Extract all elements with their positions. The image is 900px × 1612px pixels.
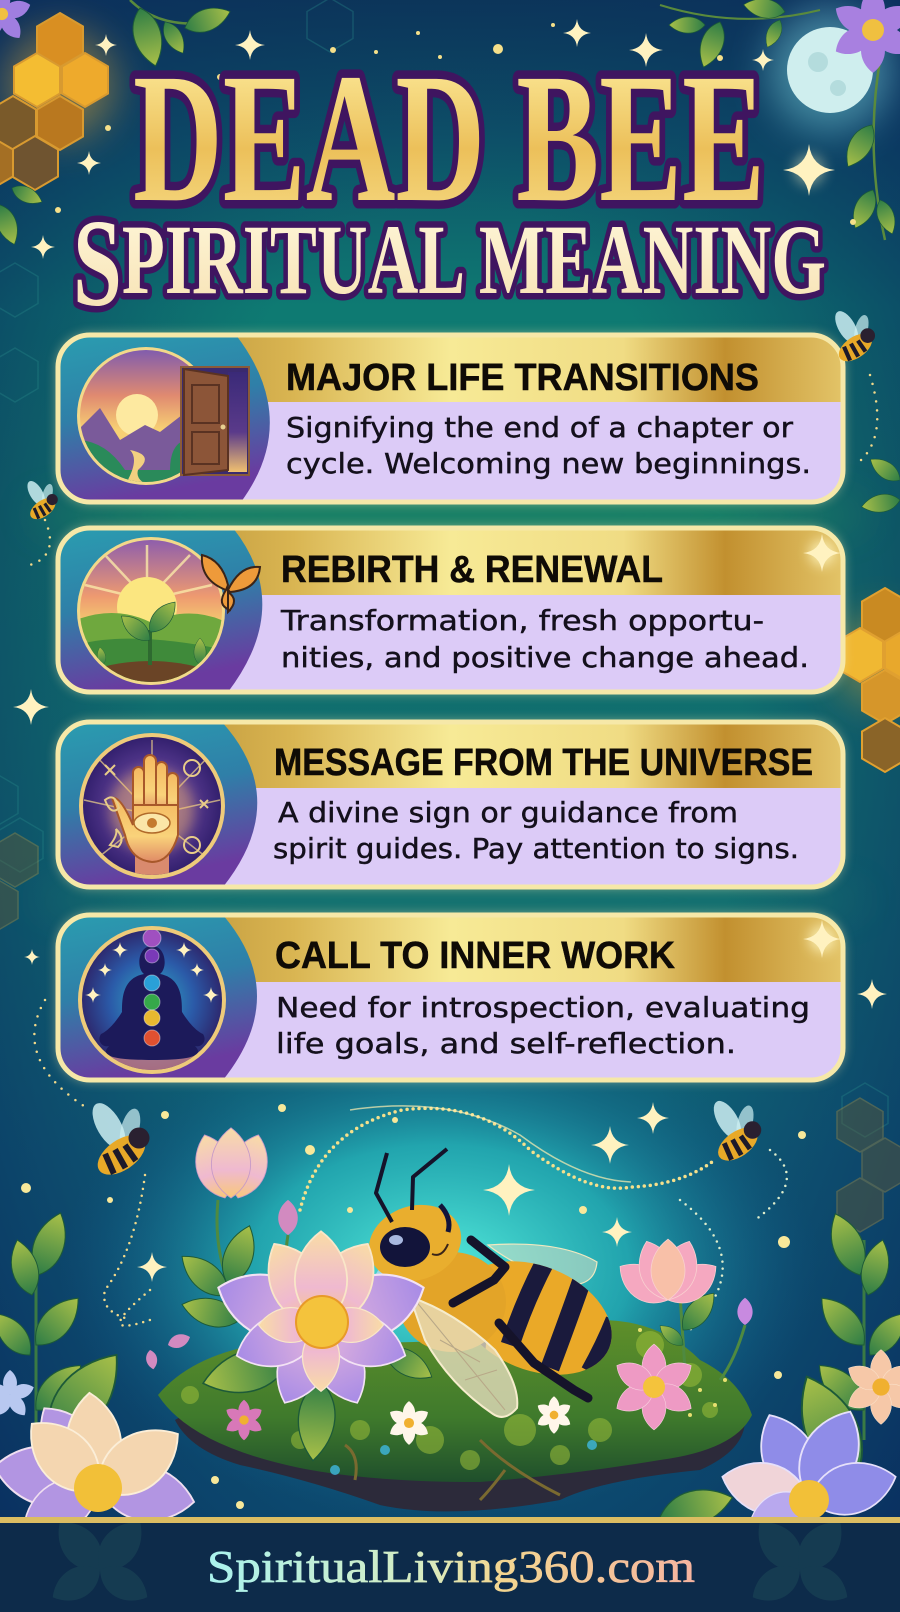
icon: glowing hand with eye xyxy=(79,733,225,886)
sparkle stars and lights top xyxy=(31,19,856,259)
card 3: message from the universe xyxy=(58,722,843,887)
mossy island xyxy=(158,1320,752,1511)
bee xyxy=(359,1149,629,1417)
pink flower upper right xyxy=(611,1235,753,1380)
description xyxy=(273,797,799,865)
thorax xyxy=(398,1252,506,1352)
legs xyxy=(453,1240,588,1398)
description: spirit guides. Pay attention to signs. xyxy=(273,833,799,865)
heading: MESSAGE FROM THE UNIVERSE xyxy=(274,742,813,784)
flower and vine top right xyxy=(660,0,900,240)
butterfly xyxy=(202,555,260,612)
back wing xyxy=(488,1244,597,1285)
right honeycomb xyxy=(835,588,900,772)
description: life goals, and self-reflection. xyxy=(276,1028,736,1060)
description: cycle. Welcoming new beginnings. xyxy=(286,448,811,480)
flower top left xyxy=(0,0,33,43)
small bee lower right xyxy=(708,1097,763,1167)
small bee lower left xyxy=(86,1098,152,1183)
moon xyxy=(768,8,892,132)
blue flower far left xyxy=(0,1370,36,1419)
abdomen with stripes xyxy=(481,1261,612,1375)
title line: Spiritual Meaning: S xyxy=(73,195,122,333)
heading: CALL TO INNER WORK xyxy=(275,935,676,977)
icon: meditating figure with chakras xyxy=(78,926,226,1080)
large flower bottom left xyxy=(0,1390,199,1549)
description: A divine sign or guidance from xyxy=(278,797,738,829)
head xyxy=(359,1149,471,1293)
icon: sunrise sprout and butterfly xyxy=(76,537,260,690)
honeycomb top left xyxy=(0,13,115,190)
pink star flower xyxy=(611,1344,697,1430)
sparkles on cards and sides xyxy=(13,375,887,1110)
footer bar xyxy=(0,1511,900,1612)
description: Need for introspection, evaluating xyxy=(276,992,810,1024)
card 2: rebirth and renewal xyxy=(58,528,843,692)
description: Signifying the end of a chapter or xyxy=(286,412,794,444)
plant right xyxy=(784,1208,900,1491)
small bee top right xyxy=(831,308,877,367)
card 1: major life transitions xyxy=(58,335,843,502)
description xyxy=(280,605,809,674)
title xyxy=(73,36,826,333)
description xyxy=(276,992,810,1060)
peach flower far right xyxy=(843,1350,900,1424)
heading: REBIRTH & RENEWAL xyxy=(281,549,663,591)
small meadow flowers xyxy=(224,1396,573,1445)
front wing xyxy=(410,1297,517,1417)
heading: MAJOR LIFE TRANSITIONS xyxy=(286,357,759,399)
large flower beside bee xyxy=(198,1231,438,1462)
tulip and stems upper left xyxy=(145,1128,298,1370)
large flower bottom right xyxy=(656,1400,900,1538)
description xyxy=(286,412,811,480)
small bee left xyxy=(24,478,59,523)
description: Transformation, fresh opportu- xyxy=(280,605,764,637)
website address: SpiritualLiving360.com xyxy=(207,1541,695,1592)
scene: sparkle trail and lights xyxy=(21,1102,806,1509)
icon: sunset path and open door xyxy=(74,347,249,490)
card 4: call to inner work xyxy=(58,915,843,1080)
door xyxy=(181,367,249,475)
description: nities, and positive change ahead. xyxy=(281,642,809,674)
right side leaves xyxy=(860,453,900,515)
plant left xyxy=(0,1208,136,1455)
vine top left xyxy=(0,0,234,248)
